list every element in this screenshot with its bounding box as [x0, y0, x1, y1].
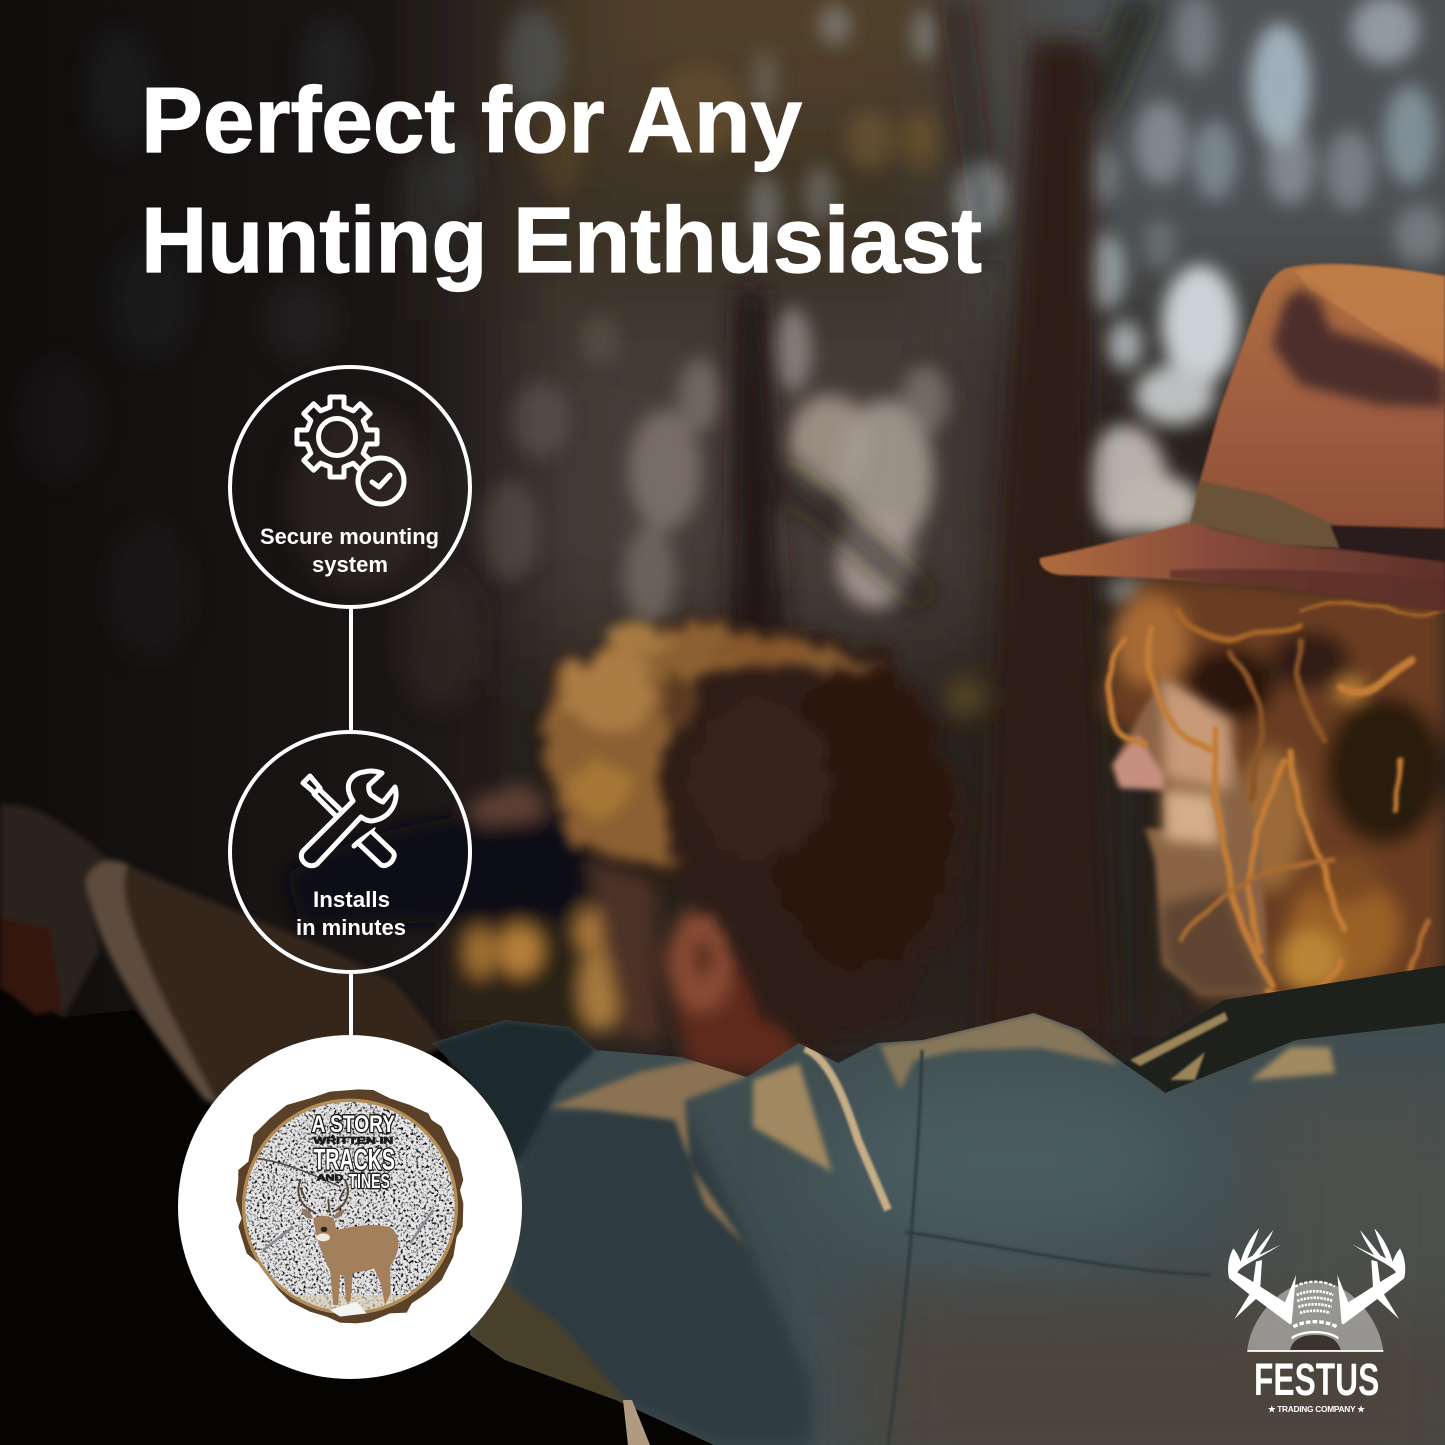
icon: crossed wrench and screwdriver	[301, 771, 396, 866]
label: secure mounting system	[260, 524, 439, 577]
sign text: TRACKS	[313, 1143, 395, 1176]
light wood rim	[242, 1099, 458, 1315]
feature: secure mounting system	[230, 367, 470, 607]
bright sky behind the hat	[1083, 265, 1238, 604]
hair base	[1100, 576, 1445, 1010]
title	[141, 68, 982, 292]
strap	[623, 1400, 650, 1445]
dark underside of the sleeve	[505, 1100, 812, 1445]
wordmark: FESTUS	[1254, 1354, 1379, 1405]
bottom-left black shadow	[0, 990, 714, 1445]
brand logo: Festus Trading Company	[1228, 1228, 1405, 1414]
sleeve cuff shadow	[432, 1020, 596, 1160]
deer	[298, 1180, 398, 1317]
lit shirt edges	[1130, 1012, 1228, 1080]
dark shirt collar behind the jacket	[1123, 965, 1445, 1100]
binoculars and hands of the second hunter	[287, 783, 660, 1040]
brown felt hat	[1040, 264, 1445, 612]
neck and ear of the second hunter	[660, 908, 810, 1075]
label: secure mounting system: Secure mounting	[260, 524, 439, 549]
left dark vignette	[0, 0, 560, 1445]
curly hair of the second hunter	[542, 617, 969, 1047]
wordmark: ★ TRADING COMPANY ★	[1267, 1404, 1365, 1414]
connector line between feature circles	[349, 607, 353, 1037]
label: secure mounting system: system	[312, 552, 388, 577]
tree bokeh highlights	[442, 0, 1445, 310]
hood rim	[805, 1048, 888, 1210]
icon: left antler	[1228, 1228, 1296, 1324]
sign text	[312, 1111, 395, 1193]
snowy forest	[245, 1102, 455, 1311]
sign text: AND	[317, 1174, 344, 1183]
jacket of the foreground hunter	[420, 1000, 1445, 1445]
wood slice sign with deer artwork	[236, 1089, 463, 1323]
sign text: A STORY	[312, 1111, 395, 1138]
mid-ground pale bokeh	[482, 64, 949, 625]
label: installs in minutes: Installs	[313, 887, 390, 912]
face skin	[1112, 676, 1270, 995]
jacket seams	[888, 1050, 1210, 1445]
hair and face of the foreground hunter	[1100, 576, 1445, 1010]
bark edge	[236, 1089, 463, 1323]
icon: gear with check mark	[297, 397, 404, 504]
dark tree trunks	[730, 0, 1160, 1040]
golden hair strands	[1108, 603, 1445, 1005]
faint dark-side bokeh	[20, 20, 480, 710]
left arm and hand of the second hunter	[0, 804, 445, 1105]
label: installs in minutes	[296, 887, 406, 940]
sign text: WRITTEN IN	[313, 1135, 394, 1145]
icon: right antler	[1337, 1228, 1405, 1324]
label: installs in minutes: in minutes	[296, 915, 406, 940]
feature: installs in minutes	[230, 732, 470, 972]
icon: turkey fan	[1247, 1282, 1383, 1351]
sign text: TINES	[348, 1171, 390, 1193]
title: Hunting Enthusiast	[141, 188, 982, 292]
sunlit top of the curls	[542, 620, 880, 867]
title: Perfect for Any	[141, 68, 802, 172]
wordmark	[1254, 1354, 1379, 1414]
sunlit jacket folds	[550, 1013, 1335, 1245]
warm light on lower sleeve edge	[470, 1282, 626, 1404]
product circle: round wood-slice sign	[178, 1035, 522, 1379]
